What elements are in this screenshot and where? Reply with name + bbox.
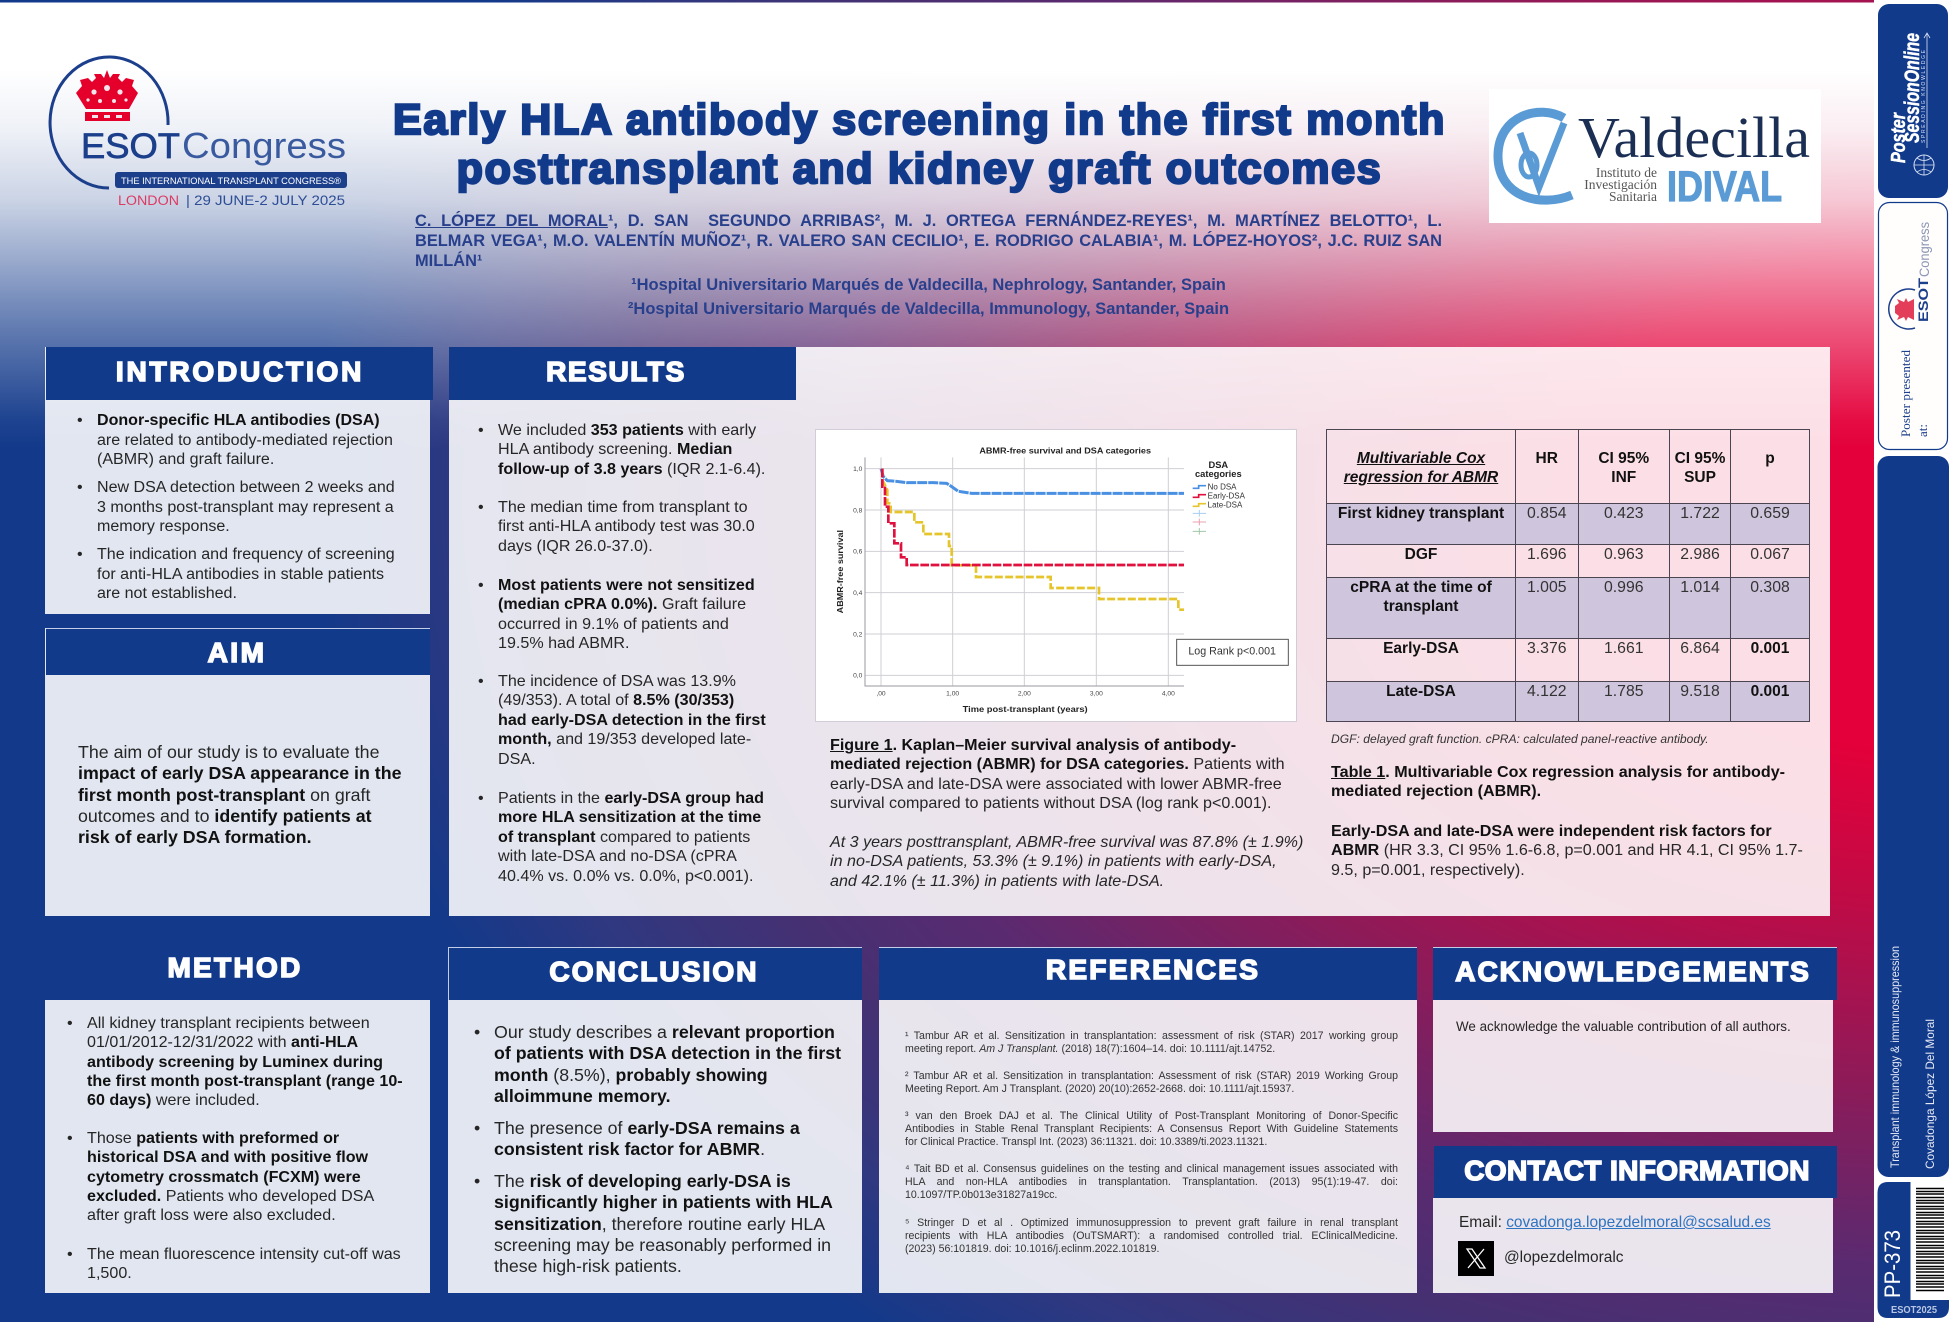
conclusion bullet: proportion: Our study describes a relevant proportion xyxy=(494,1022,835,1042)
sidebar card: category and author: Covadonga López Del Moral xyxy=(1923,1019,1937,1169)
IDIVAL wordmark: IDIVAL xyxy=(1667,163,1782,211)
curve: no DSA xyxy=(881,469,1184,493)
conclusion body background xyxy=(448,1000,862,1293)
figure survival note xyxy=(829,833,1303,890)
sidebar card: poster presented at ESOT Congress: ESOT xyxy=(1915,277,1931,322)
results bullet: incidence: month, and 19/353 developed late- xyxy=(498,730,751,748)
method bullet: cut-off: 1,500. xyxy=(87,1264,132,1282)
affiliations xyxy=(628,276,1229,318)
method bullet: exclusions xyxy=(87,1129,374,1226)
legend: No DSA xyxy=(1208,483,1237,492)
contact email: Email: covadonga.lopezdelmoral@scsalud.es xyxy=(1459,1214,1771,1231)
institute name: Instituto de xyxy=(1596,165,1657,180)
sidebar card: poster number and barcode: ESOT2025 xyxy=(1891,1304,1937,1316)
authors xyxy=(415,211,1442,270)
results bullet: incidence: (49/353). A total of 8.5% (30/353) xyxy=(498,691,734,709)
bullet: DSA: (ABMR) and graft failure. xyxy=(97,450,274,468)
results bullet: early-DSA group xyxy=(498,789,764,886)
reference 3: Antibodies in Stable Renal Transplant Recipients: A Consensus Report With Guideline Statements xyxy=(905,1123,1398,1135)
table: multivariable Cox regression: CI 95% xyxy=(1675,450,1725,467)
aim text: impact of early DSA appearance in the xyxy=(78,763,401,783)
aim text: first month post-transplant on graft xyxy=(78,785,370,805)
bullet: DSA: Donor-specific HLA antibodies (DSA) xyxy=(97,411,380,429)
aim header xyxy=(46,628,430,675)
table: multivariable Cox regression: 6.864 xyxy=(1680,640,1720,657)
table: multivariable Cox regression: p xyxy=(1765,450,1775,467)
conclusion bullet: proportion: alloimmune memory. xyxy=(494,1086,671,1106)
y axis ticks xyxy=(853,466,863,680)
table: multivariable Cox regression: 1.722 xyxy=(1680,505,1720,522)
table: multivariable Cox regression: 1.661 xyxy=(1604,640,1644,657)
panel: contact information xyxy=(1433,1146,1837,1293)
bullet: screening: are not established. xyxy=(97,584,237,602)
conclusion bullet: risk factor: The presence of early-DSA remains a xyxy=(494,1118,800,1138)
conclusion bullet: sensitization: The risk of developing early-DSA is xyxy=(494,1171,791,1191)
results bullet: sensitization: Most patients were not sensitized xyxy=(498,576,755,594)
bullet: screening: for anti-HLA antibodies in stable patients xyxy=(97,564,384,582)
chart title: ABMR-free survival and DSA categories xyxy=(979,445,1151,455)
results bullet: median time: days (IQR 26.0-37.0). xyxy=(498,537,653,555)
legend: Early-DSA xyxy=(1208,492,1246,501)
results bullet: median time: first anti-HLA antibody test was 30.0 xyxy=(498,517,755,535)
logo: Valdecilla IDIVAL xyxy=(1489,98,1821,223)
y axis label: ABMR-free survival xyxy=(835,530,845,613)
table: multivariable Cox regression: cPRA at the time of xyxy=(1350,579,1492,596)
results bullet: patients: HLA antibody screening. Median xyxy=(498,440,732,458)
bullet: screening xyxy=(97,545,395,604)
affiliations: ¹Hospital Universitario Marqués de Valdecilla, Nephrology, Santander, Spain xyxy=(631,276,1226,294)
figure caption: survival compared to patients without DSA (log rank p<0.001). xyxy=(830,794,1271,812)
bullet: screening: The indication and frequency of screening xyxy=(97,545,395,563)
figure survival note: in no-DSA patients, 53.3% (± 9.1%) in patients with early-DSA, xyxy=(830,852,1277,870)
table: multivariable Cox regression: 0.963 xyxy=(1604,546,1644,563)
figure survival note: and 42.1% (± 11.3%) in patients with late-DSA. xyxy=(830,872,1164,890)
table: multivariable Cox regression: INF xyxy=(1611,468,1636,486)
reference 4: ⁴ Tait BD et al. Consensus guidelines on the testing and clinical management issues associated with xyxy=(905,1162,1398,1174)
reference 3: for Clinical Practice. Transpl Int. (2023) 36:11321. doi: 10.3389/ti.2023.11321. xyxy=(905,1136,1267,1148)
table: multivariable Cox regression: regression for ABMR xyxy=(1344,468,1498,486)
panel: acknowledgements xyxy=(1433,947,1837,1132)
method bullet: recipients: the first month post-transplant (range 10- xyxy=(87,1072,403,1090)
table: multivariable Cox regression: 1.014 xyxy=(1680,579,1720,596)
chart: Kaplan–Meier survival xyxy=(815,429,1297,722)
sidebar card: category and author xyxy=(1878,456,1949,1177)
institute name: Investigación xyxy=(1584,177,1657,192)
table: multivariable Cox regression: CI 95% xyxy=(1598,450,1649,467)
method body background xyxy=(45,1000,430,1293)
bullet: memory response: memory response. xyxy=(97,517,230,535)
banner: THE INTERNATIONAL TRANSPLANT CONGRESS® xyxy=(121,176,341,187)
table: multivariable Cox regression: DGF xyxy=(1405,546,1437,563)
panel: method xyxy=(45,952,430,1293)
heading: results: RESULTS xyxy=(546,356,686,387)
bullet: memory response: New DSA detection between 2 weeks and xyxy=(97,478,395,496)
method bullet: recipients: 01/01/2012-12/31/2022 with anti-HLA xyxy=(87,1033,358,1051)
reference 3 xyxy=(905,1110,1398,1148)
banner xyxy=(115,172,347,188)
table conclusion: Early-DSA and late-DSA were independent risk factors for xyxy=(1331,822,1772,840)
title: posttransplant and kidney graft outcomes xyxy=(457,144,1382,192)
congress location and dates xyxy=(118,193,345,208)
reference 5: ⁵ Stringer D et al . Optimized immunosuppression to prevent graft failure in renal transplant xyxy=(905,1216,1398,1228)
panel: conclusion xyxy=(448,947,862,1293)
conclusion bullet: sensitization: significantly higher in patients with HLA xyxy=(494,1192,833,1212)
method bullet: cut-off xyxy=(87,1245,401,1284)
table conclusion xyxy=(1331,822,1803,879)
acknowledgements text: We acknowledge the valuable contribution of all authors. xyxy=(1456,1019,1791,1034)
sidebar card: poster presented at ESOT Congress: Congress xyxy=(1916,222,1932,277)
table: multivariable Cox regression: HR xyxy=(1536,450,1558,467)
reference 4: 10.1097/TP.0b013e31827a19cc. xyxy=(905,1189,1057,1201)
x axis ticks: 3,00 xyxy=(1090,691,1103,698)
results bullet: sensitization xyxy=(498,576,755,654)
table conclusion: ABMR (HR 3.3, CI 95% 1.6-6.8, p=0.001 and HR 4.1, CI 95% 1.7- xyxy=(1331,841,1803,859)
table: multivariable Cox regression: 0.996 xyxy=(1604,579,1644,596)
results bullet: incidence: The incidence of DSA was 13.9% xyxy=(498,672,736,690)
y axis ticks: 0,8 xyxy=(853,507,863,514)
bullet: DSA xyxy=(97,411,393,470)
introduction header xyxy=(46,347,433,400)
reference 4 xyxy=(905,1162,1398,1201)
results bullet: sensitization: 19.5% had ABMR. xyxy=(498,634,630,652)
log rank box: Log Rank p<0.001 xyxy=(1188,646,1276,658)
results bullet: sensitization: occurred in 9.1% of patients and xyxy=(498,615,729,633)
x axis label: Time post-transplant (years) xyxy=(963,704,1088,714)
table: multivariable Cox regression: Early-DSA xyxy=(1383,640,1459,657)
aim text: The aim of our study is to evaluate the xyxy=(78,742,379,762)
legend: Late-DSA xyxy=(1208,501,1243,510)
conclusion bullet: sensitization: screening may be reasonably performed in xyxy=(494,1235,831,1255)
results bullet: early-DSA group: 40.4% vs. 0.0% vs. 0.0%, p<0.001). xyxy=(498,867,753,885)
results bullet: median time: The median time from transplant to xyxy=(498,498,748,516)
conclusion bullet: sensitization: sensitization, therefore routine early HLA xyxy=(494,1214,825,1234)
heading: method: METHOD xyxy=(167,952,303,983)
crown icon xyxy=(76,70,138,121)
bullet: DSA: are related to antibody-mediated rejection xyxy=(97,430,393,448)
x axis ticks: 1,00 xyxy=(946,691,959,698)
conclusion bullet: proportion xyxy=(494,1022,841,1107)
method bullet: recipients: All kidney transplant recipients between xyxy=(87,1014,370,1032)
table: multivariable Cox regression: 1.005 xyxy=(1527,579,1567,596)
reference 5: (2023) 56:101819. doi: 10.1016/j.eclinm.2022.101819. xyxy=(905,1243,1159,1255)
title: Early HLA antibody screening in the first month xyxy=(393,96,1446,144)
figure caption xyxy=(830,736,1285,812)
reference 2 xyxy=(905,1070,1398,1095)
y axis ticks: 0,6 xyxy=(853,549,863,556)
y axis ticks: 0,0 xyxy=(853,673,863,680)
acknowledgements body background xyxy=(1433,1000,1833,1132)
barcode xyxy=(1916,1188,1944,1290)
reference 5 xyxy=(905,1216,1398,1255)
x axis ticks: 2,00 xyxy=(1018,691,1031,698)
curve: early-DSA xyxy=(882,469,1184,565)
conclusion header xyxy=(448,947,862,1000)
table conclusion: 9.5, p=0.001, respectively). xyxy=(1331,861,1525,879)
sidebar card: Poster Session Online: SessionOnline xyxy=(1901,33,1924,143)
reference 1: ¹ Tambur AR et al. Sensitization in transplantation: assessment of risk (STAR) 2017 working group xyxy=(905,1030,1398,1042)
table footnote: DGF: delayed graft function. cPRA: calculated panel-reactive antibody. xyxy=(1331,732,1709,746)
table: multivariable Cox regression: 0.308 xyxy=(1750,579,1790,596)
aim text xyxy=(78,742,401,847)
icon: X logo xyxy=(1458,1241,1494,1276)
reference 2: Meeting Report. Am J Transplant. (2020) 20(10):2652-2668. doi: 10.1111/ajt.15937. xyxy=(905,1083,1294,1095)
panel: results xyxy=(449,347,1830,916)
conclusion bullet: risk factor: consistent risk factor for ABMR. xyxy=(494,1139,765,1159)
reference 3: ³ van den Broek DAJ et al. The Clinical Utility of Post-Transplant Monitoring of Donor-Specific xyxy=(905,1110,1398,1122)
sidebar card: poster number and barcode: PP-373 xyxy=(1880,1230,1905,1298)
congress location and dates: | 29 JUNE-2 JULY 2025 xyxy=(186,193,345,208)
results bullet: incidence xyxy=(498,672,766,769)
Valdecilla wordmark: Valdecilla xyxy=(1578,105,1810,170)
table: multivariable Cox regression: Late-DSA xyxy=(1386,683,1456,700)
results bullet: early-DSA group: of transplant compared to patients xyxy=(498,828,750,846)
table: multivariable Cox regression: 3.376 xyxy=(1527,640,1567,657)
results bullet: early-DSA group: Patients in the early-DSA group had xyxy=(498,789,764,807)
Congress wordmark: Congress xyxy=(182,125,346,166)
sidebar card: poster number and barcode xyxy=(1878,1182,1949,1318)
heading: conclusion: CONCLUSION xyxy=(549,956,759,987)
curve: late-DSA xyxy=(882,469,1184,610)
sidebar card: category and author: Transplant immunology & immunosuppression xyxy=(1888,946,1902,1168)
table: multivariable Cox regression: 0.001 xyxy=(1751,683,1789,700)
results bullet: incidence: had early-DSA detection in the first xyxy=(498,711,766,729)
reference 1: meeting report. Am J Transplant. (2018) 18(7):1604–14. doi: 10.1111/ajt.14752. xyxy=(905,1043,1275,1055)
authors: BELMAR VEGA¹, M.O. VALENTÍN MUÑOZ¹, R. VALERO SAN CECILIO¹, E. RODRIGO CALABIA¹, M. LÓPEZ-HOYOS², J.C. RUIZ SAN xyxy=(415,232,1442,250)
sidebar card: poster presented at ESOT Congress: at: xyxy=(1915,424,1930,437)
table: multivariable Cox regression: 2.986 xyxy=(1680,546,1720,563)
table: multivariable Cox regression: 4.122 xyxy=(1527,683,1567,700)
bullet: memory response xyxy=(97,478,395,536)
contact X handle: @lopezdelmoralc xyxy=(1504,1249,1624,1266)
heading: aim: AIM xyxy=(208,637,266,668)
references body background xyxy=(879,1000,1417,1293)
authors: MILLÁN¹ xyxy=(415,252,482,270)
table: multivariable Cox regression: 1.696 xyxy=(1527,546,1567,563)
method bullet: exclusions: Those patients with preformed or xyxy=(87,1129,339,1147)
conclusion bullet: proportion: of patients with DSA detection in the first xyxy=(494,1043,841,1063)
sidebar card: poster presented at ESOT Congress: Poster presented xyxy=(1898,350,1913,437)
table: multivariable Cox regression: 0.659 xyxy=(1750,505,1790,522)
method bullet: recipients: antibody screening by Luminex during xyxy=(87,1053,383,1071)
table: multivariable Cox regression: Multivariable Cox xyxy=(1357,450,1485,467)
heading: introduction: INTRODUCTION xyxy=(116,356,364,387)
table: multivariable Cox regression xyxy=(1326,429,1810,722)
method bullet: exclusions: historical DSA and with positive flow xyxy=(87,1148,368,1166)
table caption: mediated rejection (ABMR). xyxy=(1331,782,1541,800)
conclusion bullet: sensitization: these high-risk patients. xyxy=(494,1256,682,1276)
table: multivariable Cox regression: 1.785 xyxy=(1604,683,1644,700)
table: multivariable Cox regression: 0.001 xyxy=(1751,640,1789,657)
table: multivariable Cox regression: 0.067 xyxy=(1750,546,1790,563)
results bullet: early-DSA group: with late-DSA and no-DSA (cPRA xyxy=(498,847,737,865)
x axis ticks: 4,00 xyxy=(1162,691,1175,698)
y axis ticks: 0,4 xyxy=(853,590,863,597)
legend: DSA xyxy=(1208,460,1228,470)
logo: ESOT Congress xyxy=(48,56,347,208)
table: multivariable Cox regression: transplant xyxy=(1384,598,1458,614)
figure survival note: At 3 years posttransplant, ABMR-free survival was 87.8% (± 1.9%) xyxy=(830,833,1303,851)
conclusion bullet: risk factor xyxy=(494,1118,800,1161)
contact body background xyxy=(1433,1198,1833,1293)
logo symbol xyxy=(1498,112,1572,200)
y axis ticks: 0,2 xyxy=(853,631,863,638)
ESOT wordmark: ESOT xyxy=(81,127,180,166)
x axis ticks: ,00 xyxy=(876,691,886,698)
method bullet: exclusions: cytometry crossmatch (FCXM) were xyxy=(87,1168,361,1186)
table: multivariable Cox regression: First kidney transplant xyxy=(1338,505,1504,522)
sidebar card: Poster Session Online xyxy=(1878,4,1948,198)
results bullet: patients: follow-up of 3.8 years (IQR 2.1-6.4). xyxy=(498,460,765,478)
heading: contact information: CONTACT INFORMATION xyxy=(1464,1155,1810,1186)
method bullet: exclusions: after graft loss were also excluded. xyxy=(87,1206,336,1224)
contact header xyxy=(1434,1146,1837,1198)
sidebar card: poster presented at ESOT Congress xyxy=(1878,202,1948,450)
aim text: outcomes and to identify patients at xyxy=(78,806,372,826)
affiliations: ²Hospital Universitario Marqués de Valdecilla, Immunology, Santander, Spain xyxy=(628,300,1229,318)
acknowledgements header xyxy=(1433,947,1837,1000)
aim text: risk of early DSA formation. xyxy=(78,827,312,847)
method bullet: cut-off: The mean fluorescence intensity cut-off was xyxy=(87,1245,401,1263)
reference 4: HLA and non-HLA antibodies in transplantation. Transplantation. (2013) 95(1):19-47. doi: xyxy=(905,1176,1398,1188)
method bullet: recipients: 60 days) were included. xyxy=(87,1091,260,1109)
reference 1 xyxy=(905,1030,1398,1055)
reference 5: recipients with HLA antibodies (OuTSMART): a randomised controlled trial. EClinicalMedicine. xyxy=(905,1230,1398,1242)
figure caption: mediated rejection (ABMR) for DSA categories. Patients with xyxy=(830,755,1285,773)
panel: references xyxy=(879,947,1417,1293)
heading: references: REFERENCES xyxy=(1046,954,1260,985)
conclusion bullet: proportion: month (8.5%), probably showing xyxy=(494,1065,768,1085)
figure caption: early-DSA and late-DSA were associated with lower ABMR-free xyxy=(830,775,1282,793)
results header xyxy=(449,347,796,400)
sidebar card: Poster Session Online: SPREADING KNOWLEDGE xyxy=(1921,49,1927,143)
references header xyxy=(879,947,1417,1000)
results bullet: patients xyxy=(498,421,765,479)
legend xyxy=(1193,460,1246,535)
title xyxy=(393,96,1446,194)
x axis ticks xyxy=(876,691,1175,698)
congress location and dates: LONDON xyxy=(118,193,179,208)
bullet: memory response: 3 months post-transplant may represent a xyxy=(97,498,394,516)
sidebar card: Poster Session Online: Poster xyxy=(1888,112,1910,163)
table caption xyxy=(1331,763,1785,800)
table: multivariable Cox regression: 9.518 xyxy=(1680,683,1720,700)
table: multivariable Cox regression: 0.423 xyxy=(1604,505,1644,522)
panel: aim xyxy=(45,628,430,916)
table: multivariable Cox regression: SUP xyxy=(1684,468,1716,486)
results bullet: median time xyxy=(498,498,755,556)
results bullet: sensitization: (median cPRA 0.0%). Graft failure xyxy=(498,595,746,613)
y axis ticks: 1,0 xyxy=(853,466,863,473)
results bullet: incidence: DSA. xyxy=(498,750,536,768)
authors: C. LÓPEZ DEL MORAL¹, D. SAN SEGUNDO ARRIBAS², M. J. ORTEGA FERNÁNDEZ-REYES¹, M. MARTÍNEZ BELOTTO¹, L. xyxy=(415,212,1442,230)
method bullet: exclusions: excluded. Patients who developed DSA xyxy=(87,1187,374,1205)
institute name xyxy=(1584,165,1657,204)
table caption: Table 1. Multivariable Cox regression analysis for antibody- xyxy=(1331,763,1785,781)
table: multivariable Cox regression: 0.854 xyxy=(1527,505,1567,522)
sidebar xyxy=(1874,0,1952,1322)
institute name: Sanitaria xyxy=(1609,189,1657,204)
reference 2: ² Tambur AR et al. Sensitization in transplantation: Assessment of risk (STAR) 2019 Working Group xyxy=(905,1070,1398,1082)
log rank box xyxy=(1177,639,1288,665)
method bullet: recipients xyxy=(87,1014,403,1111)
logo arc xyxy=(50,57,168,188)
panel: introduction xyxy=(45,347,430,614)
heading: acknowledgements: ACKNOWLEDGEMENTS xyxy=(1455,956,1811,987)
results bullet: patients: We included 353 patients with early xyxy=(498,421,756,439)
conclusion bullet: sensitization xyxy=(494,1171,833,1278)
legend: categories xyxy=(1195,469,1242,479)
figure caption: Figure 1. Kaplan–Meier survival analysis of antibody- xyxy=(830,736,1236,754)
results bullet: early-DSA group: more HLA sensitization at the time xyxy=(498,808,761,826)
